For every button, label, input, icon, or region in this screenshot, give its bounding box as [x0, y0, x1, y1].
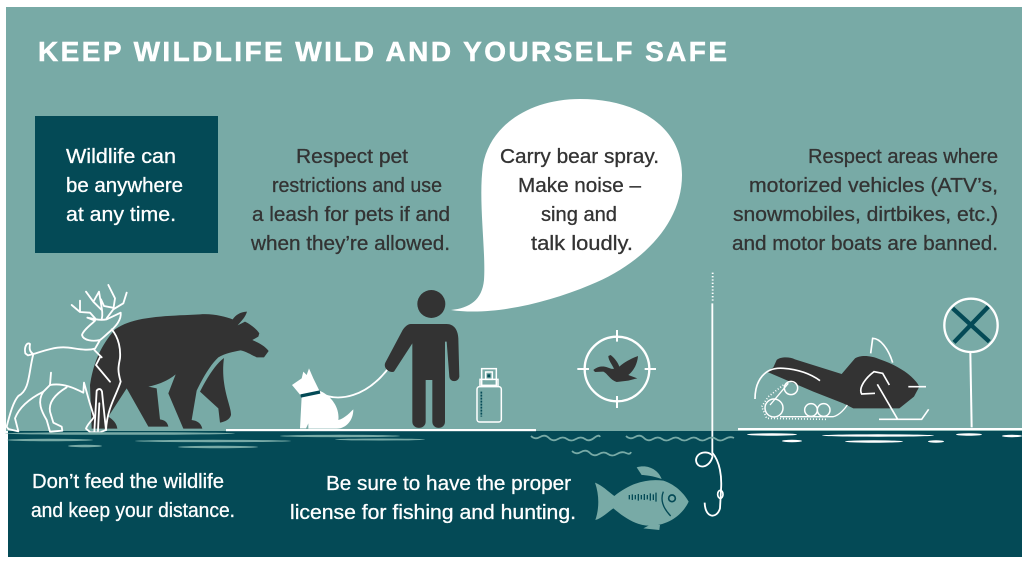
speech bubble: bear spray: Carry bear spray. [500, 146, 659, 168]
text block: don't feed wildlife: and keep your distance. [31, 500, 235, 522]
text block: pet restrictions [250, 146, 450, 255]
icon: bear [90, 312, 269, 429]
panel: water ground band [8, 431, 1022, 557]
callout box: wildlife anywhere: at any time. [66, 204, 176, 226]
text block: motorized vehicles: snowmobiles, dirtbikes, etc.) [733, 204, 998, 226]
speech bubble: bear spray: talk loudly. [531, 233, 633, 255]
icon: snowmobile [755, 338, 929, 419]
text block: motorized vehicles: and motor boats are banned. [732, 233, 998, 255]
callout box: wildlife anywhere: be anywhere [66, 175, 183, 197]
text block: pet restrictions: restrictions and use [272, 175, 442, 197]
title: KEEP WILDLIFE WILD AND YOURSELF SAFE [38, 36, 727, 67]
text block: don't feed wildlife [31, 471, 235, 522]
icon: bear spray can [477, 369, 501, 422]
speech bubble: bear spray: Make noise – [518, 175, 642, 197]
icon: fish [595, 466, 689, 530]
icon: no vehicles sign [944, 299, 998, 427]
text block: fishing license [290, 473, 576, 524]
callout box: wildlife anywhere [35, 116, 218, 253]
text block: pet restrictions: Respect pet [296, 146, 408, 168]
icon: dog on leash [292, 365, 391, 429]
icon: fishing line and hook [696, 273, 723, 516]
panel: sky background [6, 7, 1022, 431]
callout box: wildlife anywhere: Wildlife can [66, 146, 176, 168]
speech bubble: bear spray: sing and [541, 204, 617, 226]
text block: motorized vehicles: Respect areas where [808, 146, 998, 168]
text block: fishing license: license for fishing and hunting. [290, 502, 576, 524]
text block: don't feed wildlife: Don’t feed the wildlife [32, 471, 224, 493]
water highlights right [747, 433, 1022, 443]
text block: fishing license: Be sure to have the proper [326, 473, 571, 495]
water waves [531, 436, 734, 456]
speech bubble: bear spray [451, 99, 682, 312]
text block: pet restrictions: when they’re allowed. [250, 233, 450, 255]
ground highlights [226, 428, 1022, 431]
icon: target on duck [577, 330, 656, 408]
icon: person [385, 290, 459, 428]
icon: deer [7, 285, 127, 432]
text block: pet restrictions: a leash for pets if and [252, 204, 450, 226]
text block: motorized vehicles [732, 146, 998, 255]
water ripples [5, 432, 425, 448]
text block: motorized vehicles: motorized vehicles (ATV’s, [749, 175, 998, 197]
